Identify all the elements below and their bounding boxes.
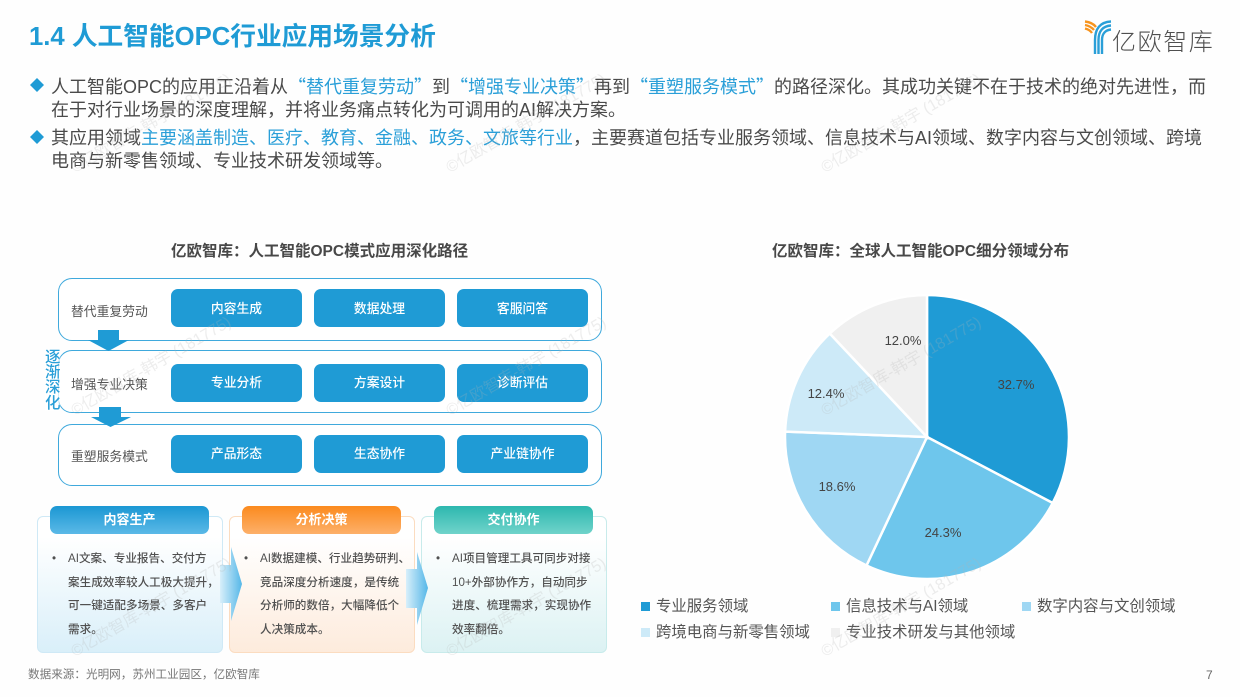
watermark: ©亿欧智库-韩宇 (181775) <box>818 70 984 176</box>
logo <box>1084 20 1214 56</box>
legend: digital content: 数字内容与文创领域 <box>1037 598 1176 615</box>
card header: 交付协作 <box>487 512 540 527</box>
pie labels: 12.0% <box>885 333 922 348</box>
watermark: ©亿欧智库-韩宇 (181775) <box>68 313 234 419</box>
arrow: card 1 to card 2 <box>220 547 242 621</box>
watermark: ©亿欧智库-韩宇 (181775) <box>443 313 609 419</box>
slice 32.7% <box>927 295 1069 503</box>
card: delivery collaboration <box>421 506 607 653</box>
bullet text 1 line 1: 人工智能OPC的应用正沿着从“替代重复劳动”到“增强专业决策”再到“重塑服务模式”的路径深化。其成功关键不在于技术的绝对先进性，而 <box>51 73 1206 99</box>
icon: logo mark <box>1084 20 1112 54</box>
pie labels <box>808 333 1035 540</box>
card header <box>434 506 593 534</box>
source note: 数据来源：光明网，苏州工业园区，亿欧智库 <box>28 668 260 681</box>
row: replace repetitive labour: 替代重复劳动 <box>71 304 148 319</box>
card text: 效率翻倍。 <box>452 623 510 636</box>
pie legend <box>641 598 1176 641</box>
row: replace repetitive labour <box>58 278 602 341</box>
row: reshape service model: 重塑服务模式 <box>71 449 148 464</box>
row: enhance professional decisions: 增强专业决策 <box>71 377 148 392</box>
pie labels: 24.3% <box>925 525 962 540</box>
card header <box>242 506 401 534</box>
watermark: ©亿欧智库-韩宇 (181775) <box>818 554 984 660</box>
slice 18.6% <box>785 432 927 566</box>
card text: 进度、梳理需求，实现协作 <box>452 599 591 612</box>
card text: 分析师的数倍，大幅降低个 <box>260 599 399 612</box>
icon: diamond bullet 1 <box>30 78 44 92</box>
pie labels: 32.7% <box>998 377 1035 392</box>
card text: 可一键适配多场景、多客户 <box>68 599 207 612</box>
pie labels: 12.4% <box>808 386 845 401</box>
watermark: ©亿欧智库-韩宇 (181775) <box>68 554 234 660</box>
legend: cross-border ecommerce: 跨境电商与新零售领域 <box>656 624 810 641</box>
row: reshape service model <box>58 424 602 486</box>
card text: AI项目管理工具可同步对接 <box>452 552 590 565</box>
left chart heading: 亿欧智库：人工智能OPC模式应用深化路径 <box>171 243 468 260</box>
icon: diamond bullet 2 <box>30 130 44 144</box>
watermark: ©亿欧智库-韩宇 (181775) <box>443 70 609 176</box>
panel: deepening path <box>45 278 602 486</box>
card: analysis and decision <box>229 506 415 653</box>
row: replace repetitive labour: 客服问答 <box>497 301 548 316</box>
card text: 竞品深度分析速度，是传统 <box>260 576 399 589</box>
row: enhance professional decisions: 诊断评估 <box>497 375 548 390</box>
label: gradually deepening: 逐渐深化 <box>45 349 61 412</box>
legend: IT and AI: 信息技术与AI领域 <box>846 598 968 615</box>
card header <box>50 506 209 534</box>
legend: R&D and others: 专业技术研发与其他领域 <box>846 624 1015 641</box>
bullet text 1 line 2: 在于对行业场景的深度理解，并将业务痛点转化为可调用的AI解决方案。 <box>51 100 626 120</box>
watermark: ©亿欧智库-韩宇 (181775) <box>443 554 609 660</box>
right chart heading: 亿欧智库：全球人工智能OPC细分领域分布 <box>772 243 1069 260</box>
card header: 分析决策 <box>295 512 348 527</box>
arrow: down 2 <box>91 407 131 427</box>
slice 12.0% <box>830 295 927 437</box>
row: reshape service model: 产业链协作 <box>490 446 554 461</box>
legend: professional services: 专业服务领域 <box>656 598 748 615</box>
card text: • <box>52 552 56 565</box>
row: replace repetitive labour: 内容生成 <box>211 301 262 316</box>
row: enhance professional decisions: 专业分析 <box>211 375 262 390</box>
row: enhance professional decisions <box>58 350 602 413</box>
pie chart <box>786 296 1068 578</box>
card: content production <box>37 506 223 653</box>
card text: AI文案、专业报告、交付方 <box>68 552 206 565</box>
card text <box>244 552 410 636</box>
logo text: 亿欧智库 <box>1112 29 1214 56</box>
card text: • <box>244 552 248 565</box>
bullet text 2 line 1: 其应用领域主要涵盖制造、医疗、教育、金融、政务、文旅等行业，主要赛道包括专业服务领域、信息技术与AI领域、数字内容与文创领域、跨境 <box>51 128 1202 148</box>
card text: 人决策成本。 <box>260 623 330 636</box>
card text: 10+外部协作方，自动同步 <box>452 576 588 589</box>
watermark: ©亿欧智库-韩宇 (181775) <box>68 70 234 176</box>
row: reshape service model: 生态协作 <box>354 446 405 461</box>
row: reshape service model: 产品形态 <box>211 446 262 461</box>
card text: AI数据建模、行业趋势研判、 <box>260 552 410 565</box>
bullet text 2 line 2: 电商与新零售领域、专业技术研发领域等。 <box>51 151 393 171</box>
arrow: down 1 <box>88 330 129 351</box>
slice 12.4% <box>785 334 927 437</box>
page number: 7 <box>1206 668 1213 682</box>
card text: 需求。 <box>68 623 103 636</box>
card header: 内容生产 <box>103 512 156 527</box>
card text <box>52 552 219 636</box>
card text: 案生成效率较人工极大提升， <box>68 576 219 589</box>
slice 24.3% <box>866 437 1053 579</box>
card text: • <box>436 552 440 565</box>
card text <box>436 552 591 636</box>
row: enhance professional decisions: 方案设计 <box>354 375 405 390</box>
row: replace repetitive labour: 数据处理 <box>354 301 405 316</box>
watermark: ©亿欧智库-韩宇 (181775) <box>818 313 984 419</box>
title: 1.4 人工智能OPC行业应用场景分析 <box>29 23 436 51</box>
arrow: card 2 to card 3 <box>406 552 428 625</box>
pie labels: 18.6% <box>819 479 856 494</box>
bullet points <box>30 73 1206 171</box>
